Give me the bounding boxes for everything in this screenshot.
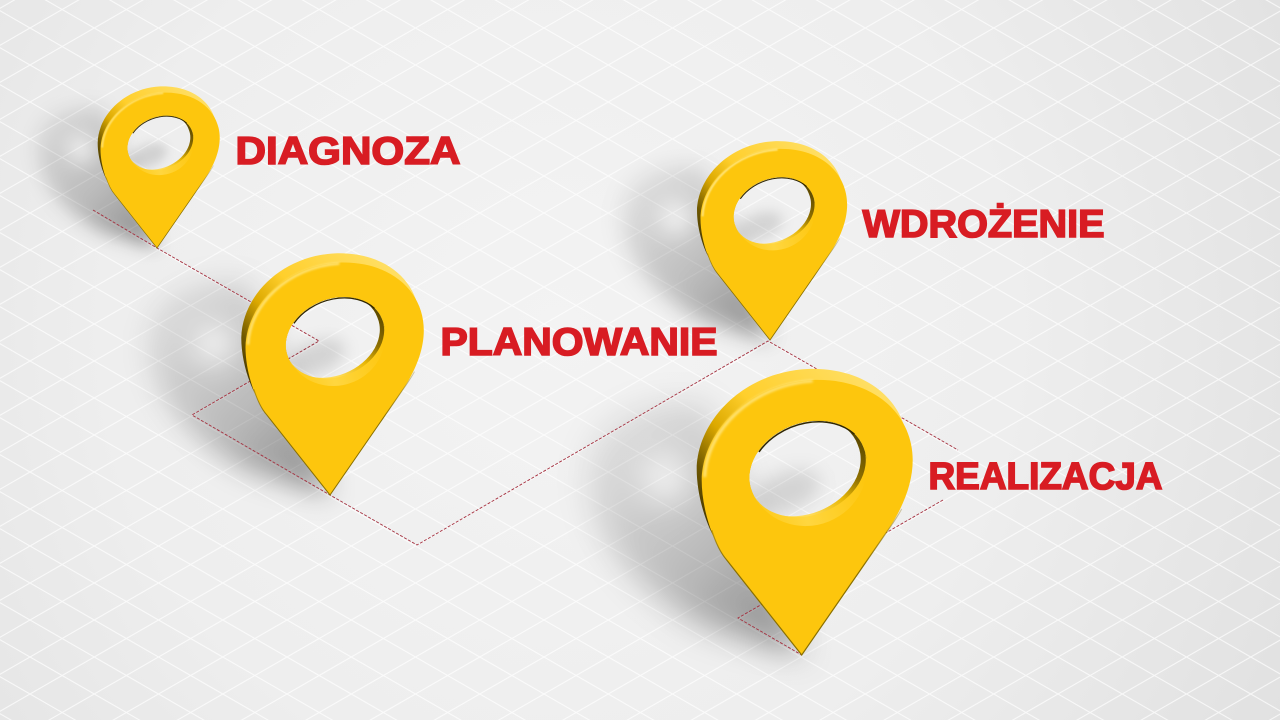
label: planowanie: PLANOWANIE (440, 321, 718, 364)
pin: planowanie (241, 253, 424, 495)
label: wdrozenie: WDROŻENIE (862, 203, 1104, 246)
pin: diagnoza (98, 86, 220, 248)
label: diagnoza: DIAGNOZA (236, 130, 460, 173)
pin shadows (37, 106, 802, 655)
pin: wdrozenie (697, 141, 847, 340)
pin: realizacja (697, 369, 913, 655)
dashed route line connecting the pins (93, 210, 958, 655)
label: realizacja: REALIZACJA (928, 456, 1162, 498)
